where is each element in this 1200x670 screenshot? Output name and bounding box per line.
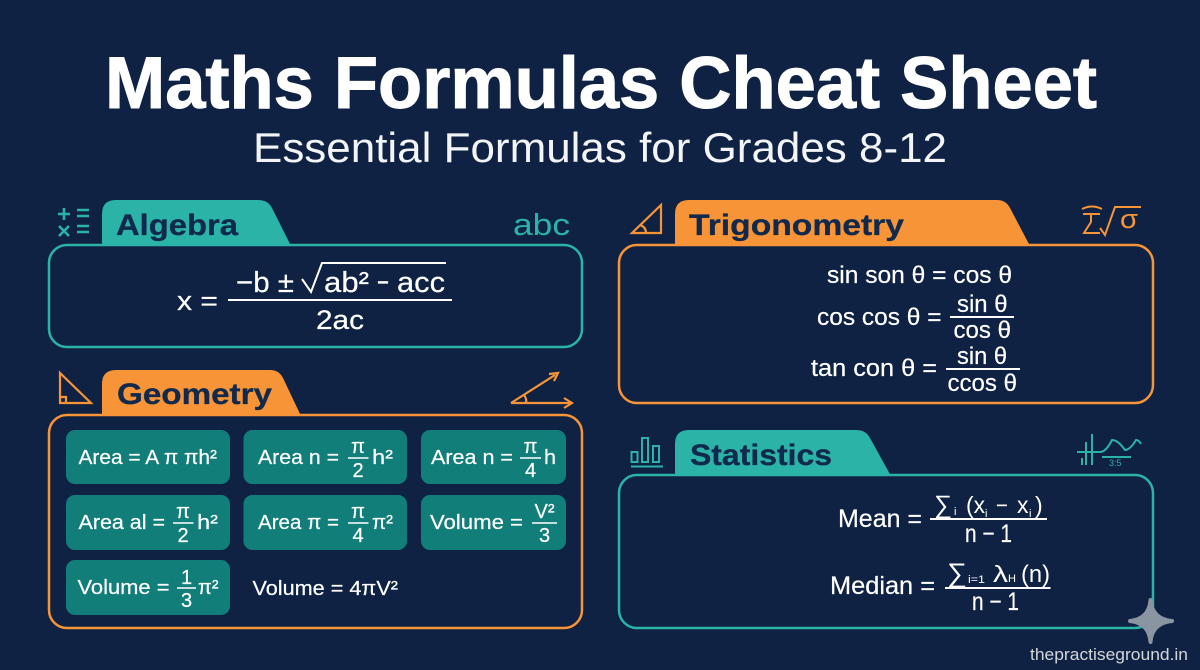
- formula: volume 2: [78, 567, 219, 612]
- formula: median: λ: [993, 561, 1009, 587]
- trigonometry heading: Trigonometry: [689, 209, 904, 242]
- icon: angle arrows: [511, 373, 572, 408]
- quadratic formula: x =: [177, 286, 218, 316]
- watermark: thepractiseground.in: [1030, 645, 1188, 664]
- formula: area 3: π: [524, 436, 537, 458]
- panel: geometry: [49, 370, 582, 628]
- statistics tab: [675, 430, 891, 476]
- icon: sparkle: [1130, 600, 1172, 642]
- geometry heading: Geometry: [117, 378, 272, 411]
- formula: area 3: h: [544, 447, 556, 469]
- statistics box: [619, 475, 1153, 628]
- formula: area 1: Area = A π πh²: [78, 447, 217, 469]
- formula: area 2: [258, 436, 393, 482]
- formula: mean: (x: [966, 492, 985, 518]
- formula: volume 1: [430, 501, 557, 547]
- formula: median: [830, 558, 1050, 616]
- formula: area 3: [431, 436, 556, 482]
- quadratic formula: −b ±: [236, 267, 294, 299]
- quadratic formula: acc: [397, 267, 445, 299]
- formula: mean: ): [1035, 492, 1043, 518]
- formula: area 2: h²: [372, 447, 393, 469]
- formula: area 5: [258, 501, 393, 547]
- formula: line 3: sin θ: [957, 343, 1007, 370]
- formula: area 2: π: [351, 436, 365, 458]
- formula: median: (n): [1021, 561, 1050, 588]
- panel: algebra: [49, 200, 582, 347]
- formula: volume 1: Volume =: [430, 512, 523, 534]
- formula: volume 2: 1: [181, 567, 192, 589]
- panel: trigonometry: [619, 200, 1153, 403]
- icon: triangle with angle: [632, 205, 661, 233]
- formula: volume 2: 3: [181, 590, 192, 612]
- statistics heading: Statistics: [690, 439, 832, 472]
- formula: median: n − 1: [972, 588, 1019, 616]
- formula: area 4: Area al =: [78, 512, 165, 534]
- formula: volume 1: 3: [539, 525, 550, 547]
- icon: right triangle: [60, 373, 91, 403]
- icon: curve graph: 3:5: [1109, 458, 1122, 468]
- icon: sigma and root: σ: [1120, 204, 1138, 234]
- formula: area 4: [78, 501, 218, 547]
- formula: mean: −: [996, 492, 1008, 518]
- formula tiles: [66, 430, 566, 615]
- subtitle: Essential Formulas for Grades 8-12: [253, 124, 947, 171]
- trigonometry tab: [675, 200, 1030, 246]
- formula: area 5: π: [351, 501, 365, 523]
- algebra tab: [102, 200, 291, 246]
- icon: curve graph: [1077, 434, 1141, 468]
- formula: mean: ∑: [934, 491, 952, 519]
- formula: area 3: 4: [525, 460, 536, 482]
- formula: volume 2: Volume =: [78, 577, 170, 599]
- formula: area 4: h²: [197, 512, 218, 534]
- formula: mean: i: [1029, 508, 1031, 520]
- formula: area 5: Area π =: [258, 512, 339, 534]
- formula: area 3: Area n =: [431, 447, 513, 469]
- formula: mean: i: [954, 506, 956, 518]
- quadratic formula: −: [377, 267, 389, 299]
- formula: line 2: sin θ: [957, 291, 1008, 318]
- quadratic formula: 2ac: [316, 305, 364, 335]
- quadratic formula: ab²: [324, 267, 369, 299]
- geometry tab: [102, 370, 301, 416]
- formula: line 3: tan con θ =: [811, 355, 937, 382]
- quadratic formula: [177, 263, 452, 335]
- formula: area 2: Area n =: [258, 447, 339, 469]
- formula: line 2: [817, 291, 1014, 344]
- formula: line 3: ccos θ: [948, 370, 1017, 397]
- formula: area 2: 2: [352, 460, 364, 482]
- title: Maths Formulas Cheat Sheet: [105, 43, 1097, 124]
- formula: area 5: 4: [352, 525, 364, 547]
- formula: volume 3: Volume = 4πV²: [252, 578, 398, 600]
- formula: line 2: cos cos θ =: [817, 304, 942, 331]
- formula: volume 1: V²: [534, 501, 555, 523]
- formula: median: H: [1008, 573, 1016, 585]
- trigonometry box: [619, 245, 1153, 403]
- formula: median: Median =: [830, 572, 935, 600]
- formula: volume 2: π²: [198, 577, 219, 599]
- formula: area 4: 2: [177, 525, 189, 547]
- formula: line 3: [811, 343, 1020, 397]
- formula: median: i=1: [968, 574, 985, 586]
- formula: area 4: π: [176, 501, 190, 523]
- formula: mean: i: [985, 508, 987, 520]
- formula: mean: [838, 491, 1047, 548]
- formula: mean: Mean =: [838, 505, 922, 533]
- formula: line 1: sin son θ = cos θ: [827, 262, 1012, 289]
- abc label: abc: [513, 207, 570, 242]
- formula: line 2: cos θ: [954, 317, 1011, 344]
- formula: area 5: π²: [372, 512, 393, 534]
- formula: mean: n − 1: [965, 520, 1012, 548]
- icon: sigma and root: [1082, 204, 1141, 235]
- geometry box: [49, 415, 582, 628]
- icon: operators: [58, 208, 89, 236]
- formula: median: ∑: [947, 558, 967, 588]
- algebra heading: Algebra: [116, 209, 238, 242]
- icon: bar chart: [631, 438, 663, 466]
- algebra box: [49, 245, 582, 347]
- formula: mean: x: [1017, 492, 1029, 518]
- panel: statistics: [619, 430, 1153, 628]
